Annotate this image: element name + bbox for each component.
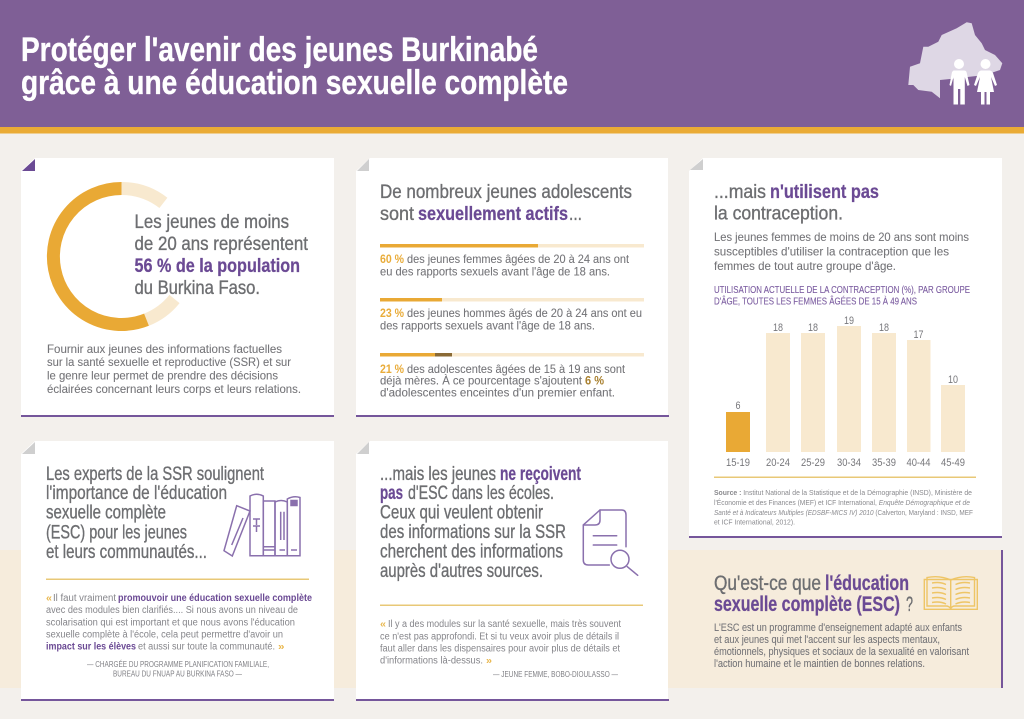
text: 60 %: des jeunes femmes âgées de 20 à 24 ans ont [407,252,630,266]
quote: young woman [380,619,621,666]
text block: CSE definition: émotionnels, physiques et sociaux de la sexualité en valorisant [714,646,969,658]
bar chart: contraceptive use by age: 19 [844,315,854,327]
bar chart: contraceptive use by age: 18 [773,322,783,334]
heading: sexually active: De nombreux jeunes adolescents [380,181,632,203]
heading: no CSE: Ceux qui veulent obtenir [380,502,543,524]
quote: young woman: « [380,619,386,630]
donut chart: 56 % [53,188,174,324]
title [21,31,568,102]
text: 60 % [380,252,630,278]
text block: contraception [714,230,969,273]
source note: et ICF International, 2012). [714,518,795,526]
quote: program officer: promouvoir une éducation sexuelle complète [118,593,312,604]
text: 23 %: 23 % [380,306,404,320]
quote: program officer: scolarisation qui est important et que nous avons l'éducation [46,618,295,628]
text block: contraception: femmes de tout autre groupe d'âge. [714,259,896,273]
text: 23 %: des rapports sexuels avant l'âge de 18 ans. [380,318,595,332]
bar chart: contraceptive use by age: 17 [914,329,924,341]
text: 21 % and 6 %: des adolescentes âgées de 15 à 19 ans sont [407,362,626,376]
quote: program officer [46,593,312,652]
heading: experts: et leurs communautés... [46,541,207,563]
bar chart: contraceptive use by age: 35-39 [872,457,896,469]
icon: document with magnifier [583,510,638,575]
bar chart: contraceptive use by age: 20-24 [766,457,790,469]
text: 60 %: eu des rapports sexuels avant l'âge de 18 ans. [380,264,610,278]
text: 60 %: 60 % [380,252,404,266]
bar chart: contraceptive use by age: 25-29 [801,457,825,469]
text: 21 % and 6 % [380,362,626,400]
quote: young woman: » [486,656,492,666]
heading: what is CSE: ? [906,593,913,616]
header banner [0,0,1024,134]
text block: information: sur la santé sexuelle et reproductive (SSR) et sur [47,355,291,369]
heading: population share: Les jeunes de moins [134,211,289,233]
panel: sexually active [356,158,669,417]
heading: experts: Les experts de la SSR soulignent [46,463,264,485]
heading: sexually active: ... [569,203,582,225]
heading: no CSE: des informations sur la SSR [380,521,566,543]
panel: population [21,158,334,417]
attribution: program officer: — CHARGÉE DU PROGRAMME PLANIFICATION FAMILIALE, [87,660,269,669]
attribution: young woman: — JEUNE FEMME, BOBO-DIOULASSO — [493,670,618,679]
text: 21 % and 6 %: d'adolescentes enceintes d'un premier enfant. [380,386,615,400]
source note: Santé et à Indicateurs Multiples (EDSBF-MICS IV) 2010 (Calverton, Maryland : INSD, MEF [714,508,973,517]
bar chart: contraceptive use by age: 10 [948,374,958,386]
heading: contraception: n'utilisent pas [770,181,879,203]
heading: contraception: ...mais [714,181,766,203]
bar chart: contraceptive use by age: 15-19 [726,457,750,469]
heading: contraception: la contraception. [714,202,843,224]
quote: young woman: Il y a des modules sur la santé sexuelle, mais très souvent [388,619,621,630]
heading: sexually active: sexuellement actifs [418,203,568,225]
attribution: program officer: BUREAU DU FNUAP AU BURKINA FASO — [113,670,242,678]
text: 21 % and 6 %: déjà mères. À ce pourcentage s'ajoutent [380,374,583,388]
heading: no CSE: ...mais les jeunes [380,463,496,485]
heading: experts: sexuelle complète [46,502,166,524]
text: 23 % [380,306,642,332]
panel: no CSE in schools [356,441,669,701]
quote: young woman: ce n'est pas approfondi. Et si tu veux avoir plus de détails il [380,632,619,642]
panel: what is CSE [714,550,1003,688]
text block: CSE definition: et aux jeunes qui met l'accent sur les aspects mentaux, [714,634,940,646]
text: 23 %: des jeunes hommes âgés de 20 à 24 ans ont eu [407,306,642,320]
text block: CSE definition [714,622,969,670]
quote: program officer: » [278,642,285,652]
quote: program officer: Il faut vraiment [53,593,116,604]
heading: what is CSE [714,572,913,616]
bar chart: contraceptive use by age: 6 [736,400,740,412]
source note: Source : Institut National de la Statistique et de la Démographie (INSD), Ministère de [714,488,972,497]
heading: no CSE [380,463,581,582]
text block: information: le genre leur permet de prendre des décisions [47,368,278,382]
panel: experts [21,441,334,701]
heading: population share: du Burkina Faso. [134,277,260,299]
heading: experts [46,463,264,563]
title: grâce à une éducation sexuelle complète [21,64,568,102]
quote: young woman: d'informations là-dessus. [380,656,483,666]
panel: contraception [689,158,1002,538]
chart title [714,284,970,308]
heading: experts: l'importance de l'éducation [46,482,227,504]
heading: what is CSE: Qu'est-ce que [714,572,821,595]
heading: sexually active: sont [380,203,415,225]
heading: experts: (ESC) pour les jeunes [46,522,187,544]
heading: sexually active [380,181,632,225]
bar: 21 % and 6 % [380,353,644,356]
text block: information [47,342,301,396]
bar chart: contraceptive use by age: 18 [879,322,889,334]
heading: no CSE: auprès d'autres sources. [380,560,543,582]
bar chart: contraceptive use by age [726,315,965,469]
heading: no CSE: ne reçoivent [500,463,581,485]
text block: contraception: Les jeunes femmes de moins de 20 ans sont moins [714,230,969,244]
title: Protéger l'avenir des jeunes Burkinabé [21,31,538,69]
quote: program officer: « [46,593,52,604]
bar: 23 % [380,298,644,302]
heading: population share: de 20 ans représentent [134,233,309,255]
quote: young woman: faut aller dans les dispensaires pour avoir plus de détails et [380,644,620,654]
chart title: D'ÂGE, TOUTES LES FEMMES ÂGÉES DE 15 À 49 ANS [714,294,917,308]
bar chart: contraceptive use by age: 18 [808,322,818,334]
heading: what is CSE: l'éducation [825,572,909,595]
icon: open book [924,577,977,609]
text block: CSE definition: l'action humaine et le maintien de bonnes relations. [714,658,925,670]
source note [714,488,973,526]
heading: what is CSE: sexuelle complète (ESC) [714,593,900,616]
source note: l'Économie et des Finances (MEF) et ICF International, Enquête Démographique et de [714,498,970,507]
heading: contraception [714,181,879,224]
bar chart: contraceptive use by age: 45-49 [941,457,965,469]
text block: information: éclairées concernant leurs corps et leurs relations. [47,382,301,396]
quote: program officer: impact sur les élèves [46,642,136,652]
text block: information: Fournir aux jeunes des informations factuelles [47,342,282,356]
icon: books [224,494,300,556]
heading: no CSE: pas [380,482,403,504]
text: 21 % and 6 %: 6 % [585,374,604,388]
heading: population share [134,211,309,299]
attribution: program officer [87,660,269,678]
heading: population share: 56 % de la population [134,255,300,277]
heading: no CSE: cherchent des informations [380,540,563,562]
bar chart: contraceptive use by age: 40-44 [906,457,930,469]
quote: program officer: avec des modules bien clarifiés.... Si nous avons un niveau de [46,605,298,616]
icon: Burkina Faso map with two children [908,22,1002,104]
text: 21 % and 6 %: 21 % [380,362,404,376]
quote: program officer: et aussi sur toute la communauté. [138,642,275,652]
text block: contraception: susceptibles d'utiliser la contraception que les [714,244,949,258]
bar: 60 % [380,244,644,248]
bar chart: contraceptive use by age: 30-34 [837,457,861,469]
quote: program officer: sexuelle complète à l'école, cela peut permettre d'avoir un [46,630,283,640]
text block: CSE definition: L'ESC est un programme d'enseignement adapté aux enfants [714,622,962,634]
heading: no CSE: d'ESC dans les écoles. [408,482,554,504]
